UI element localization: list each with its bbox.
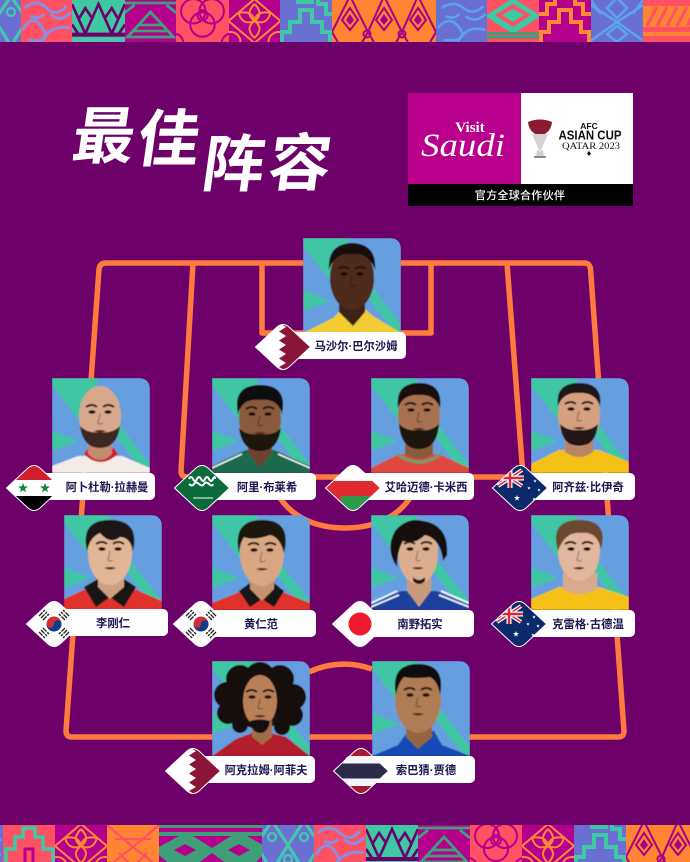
player: Australia midfielder (491, 515, 635, 648)
photo (371, 378, 469, 473)
title: 佳 (132, 89, 207, 179)
player: Saudi defender (174, 378, 316, 512)
flag: Japan (332, 601, 374, 647)
player: Qatar forward (165, 661, 315, 795)
name label (360, 610, 474, 637)
flag: Saudi Arabia (174, 464, 230, 512)
player: Australia midfielder: 克雷格·古德温 (552, 617, 624, 631)
flag: Qatar (165, 747, 221, 795)
player: goalkeeper: 马沙尔·巴尔沙姆 (315, 339, 397, 353)
photo (212, 661, 310, 756)
photo (531, 515, 629, 610)
logo: AFC Asian Cup text: ASIAN CUP (558, 128, 622, 142)
flag: Thailand (333, 747, 389, 795)
name label (205, 610, 316, 637)
logo: AFC trophy (528, 120, 552, 158)
flag: Qatar (255, 323, 311, 371)
top pattern band (0, 0, 690, 52)
name label (345, 756, 475, 783)
player: Thailand forward: 索巴猜·贾德 (396, 763, 457, 777)
player: Qatar forward: 阿克拉姆·阿菲夫 (225, 763, 308, 777)
name label (520, 610, 635, 637)
flag: Oman (325, 464, 381, 512)
flag: Syria (6, 465, 52, 511)
name label (520, 473, 635, 500)
player: goalkeeper (255, 238, 406, 371)
pitch lines (66, 263, 624, 737)
title (67, 86, 338, 204)
photo (531, 378, 629, 473)
title: 容 (263, 113, 338, 203)
player: Australia defender: 阿齐兹·比伊奇 (552, 480, 624, 494)
photo (64, 515, 162, 610)
logo: AFC Asian Cup text: QATAR 2023 (562, 142, 620, 152)
photo (52, 378, 150, 473)
name label (270, 332, 406, 359)
player: Syria defender: 阿卜杜勒·拉赫曼 (66, 480, 148, 494)
player: Korea midfielder 1: 李刚仁 (96, 616, 130, 630)
name label (60, 609, 168, 636)
bottom pattern band (0, 821, 690, 862)
player: Australia defender (492, 378, 635, 512)
flag: South Korea (26, 600, 82, 648)
logo: Visit Saudi: Visit (455, 120, 485, 136)
name label (40, 473, 155, 500)
player: Korea midfielder 2: 黄仁范 (244, 617, 278, 631)
player: Syria defender (6, 378, 155, 512)
player: Thailand forward (333, 661, 475, 795)
photo (303, 238, 401, 333)
logo: AFC Asian Cup text (558, 121, 622, 156)
photo (371, 515, 469, 610)
photo (372, 661, 470, 756)
player: Korea midfielder 2 (173, 515, 316, 648)
flag: Australia (492, 464, 548, 512)
photo (212, 515, 310, 610)
flag: Australia (491, 600, 547, 648)
sponsor logo panel (408, 93, 633, 206)
player: Oman defender: 艾哈迈德·卡米西 (385, 480, 467, 494)
player: Japan midfielder (332, 515, 474, 648)
name label (180, 756, 315, 783)
name label (360, 473, 474, 500)
logo: Visit Saudi: Saudi (421, 128, 505, 164)
player: Korea midfielder 1 (26, 515, 168, 648)
flag: South Korea (173, 600, 229, 648)
photo (212, 378, 310, 473)
title: 阵 (197, 114, 272, 204)
player: Saudi defender: 阿里·布莱希 (237, 480, 297, 494)
logo: AFC Asian Cup text: AFC (580, 121, 598, 131)
partner caption: 官方全球合作伙伴 (475, 188, 565, 202)
name label (200, 473, 316, 500)
title: 最 (67, 86, 142, 176)
player: Oman defender (325, 378, 474, 512)
player: Japan midfielder: 南野拓实 (397, 617, 443, 631)
